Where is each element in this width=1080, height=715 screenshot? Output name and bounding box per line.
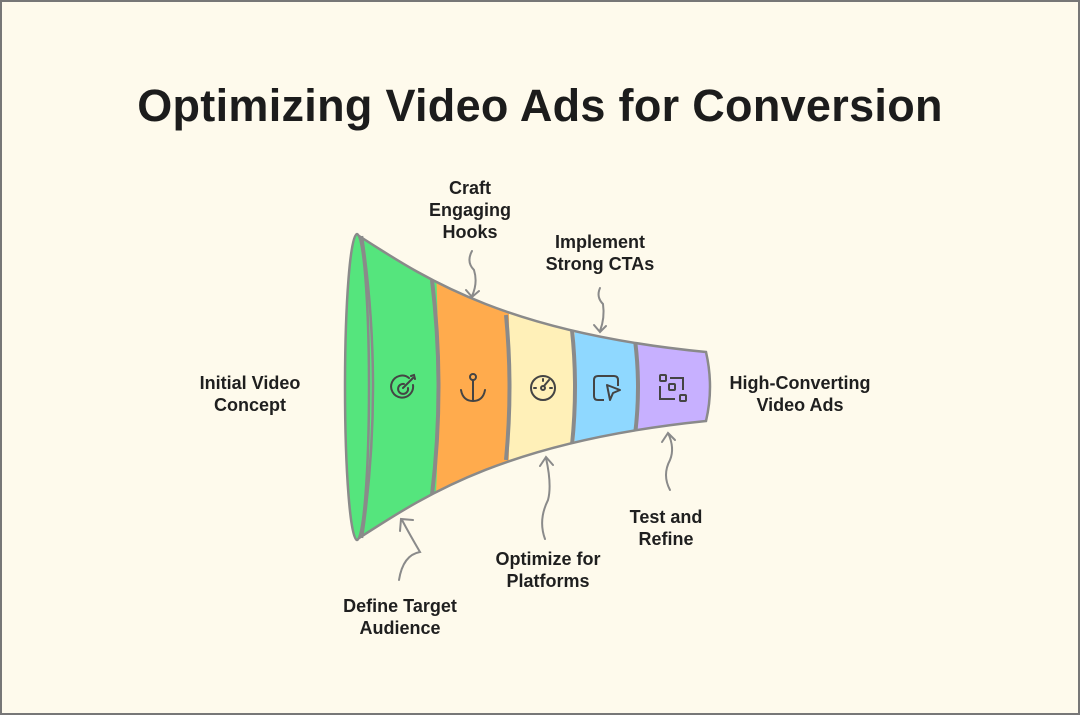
label: Define Target Audience [343,596,457,638]
icon: blocks [660,375,686,401]
label: Define Target Audience: Audience [359,618,441,638]
label: Initial Video Concept: Concept [214,395,286,415]
arrows [399,251,675,580]
label: Optimize for Platforms: Platforms [506,571,590,591]
icon: gauge [531,376,555,400]
label: Craft Engaging Hooks: Craft [449,178,491,198]
label: Test and Refine: Test and [630,507,702,527]
label: Initial Video Concept [200,373,300,415]
label: Implement Strong CTAs: Implement [555,232,645,252]
label: High-Converting Video Ads: High-Converting [730,373,870,393]
icon: anchor [461,374,485,401]
label: Define Target Audience: Define Target [343,596,457,616]
icon: target [391,375,415,398]
label: High-Converting Video Ads [730,373,870,415]
label: Optimize for Platforms: Optimize for [495,549,600,569]
funnel diagram [344,232,712,581]
label: Initial Video Concept: Initial Video [200,373,300,393]
label: Implement Strong CTAs: Strong CTAs [546,254,654,274]
label: High-Converting Video Ads: Video Ads [756,395,844,415]
label: Test and Refine [630,507,702,549]
label: Craft Engaging Hooks: Engaging [429,200,511,220]
icon: cursor screen [594,376,620,400]
label: Implement Strong CTAs [546,232,654,274]
title: Optimizing Video Ads for Conversion [137,80,943,131]
label: Optimize for Platforms [495,549,600,591]
label: Test and Refine: Refine [638,529,694,549]
label: Craft Engaging Hooks: Hooks [442,222,498,242]
label: Craft Engaging Hooks [429,178,511,242]
